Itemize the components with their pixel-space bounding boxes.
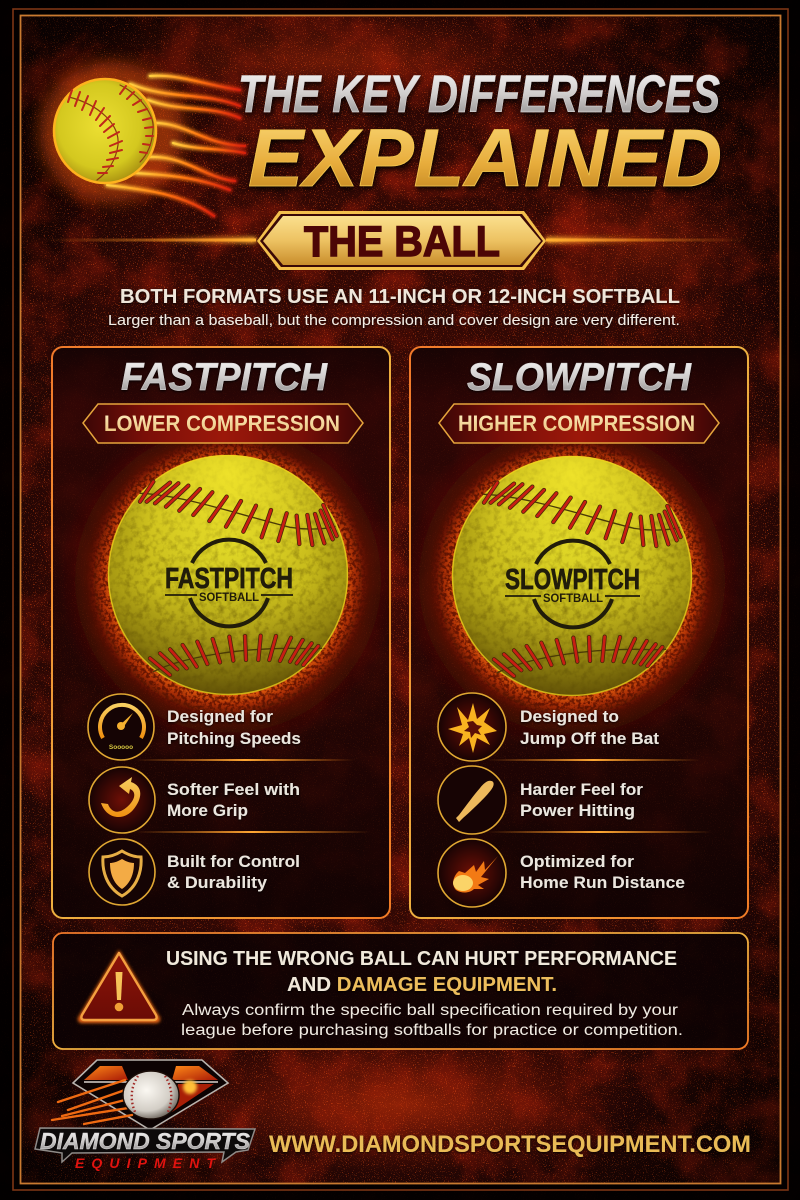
logo flame streaks [52, 1080, 132, 1124]
flaming softball icon [40, 62, 245, 216]
fire glow: slowpitch ball [411, 444, 734, 743]
icon: comet [453, 856, 498, 893]
logo wordmark: DIAMOND SPORTS [40, 1128, 251, 1154]
warning panel [53, 933, 748, 1049]
feature: power hitting [438, 766, 643, 834]
logo wordmark: EQUIPMENT [75, 1155, 216, 1171]
warning heading: USING THE WRONG BALL CAN HURT PERFORMANCE [166, 948, 677, 970]
icon: speedometer [100, 705, 144, 751]
feature: home run distance: Optimized for [520, 852, 634, 871]
compression banner: higher [439, 404, 719, 443]
feature: pitching speeds: Pitching Speeds [167, 729, 301, 748]
intro text [108, 285, 680, 329]
feature: home run distance: Home Run Distance [520, 873, 685, 892]
logo wordmark [35, 1128, 255, 1171]
ball logo [165, 540, 293, 626]
compression banner: lower: LOWER COMPRESSION [104, 411, 340, 436]
intro text: Larger than a baseball, but the compression and cover design are very different. [108, 312, 680, 329]
panel: slowpitch [400, 347, 748, 918]
warning body text [181, 1002, 683, 1039]
section badge: the ball: THE BALL [304, 218, 500, 266]
website url: WWW.DIAMONDSPORTSEQUIPMENT.COM [269, 1131, 751, 1158]
ball logo: FASTPITCH [165, 563, 293, 595]
flame streaks [107, 76, 245, 216]
ball logo [505, 541, 640, 627]
logo baseball [123, 1071, 179, 1119]
compression banner: lower [83, 404, 363, 443]
warning heading [166, 948, 677, 996]
panel heading: fastpitch: FASTPITCH [121, 356, 328, 399]
panel: fastpitch [52, 347, 400, 918]
ball logo: SOFTBALL [199, 592, 259, 604]
feature: control and durability: & Durability [167, 873, 268, 892]
fire glow: fastpitch ball [66, 444, 388, 742]
softball: fastpitch [108, 455, 348, 695]
softball: slowpitch [452, 456, 692, 696]
title [238, 65, 722, 204]
intro text: BOTH FORMATS USE AN 11-INCH OR 12-INCH SOFTBALL [120, 285, 680, 308]
feature: power hitting: Harder Feel for [520, 780, 643, 799]
section badge: the ball [45, 211, 746, 270]
feature: pitching speeds [88, 694, 301, 760]
feature: jump off the bat [438, 693, 659, 761]
feature: control and durability [89, 839, 300, 905]
icon: bat [456, 781, 494, 822]
feature: softer feel [89, 767, 300, 833]
icon: speedometer: Sooooo [109, 744, 133, 751]
feature: softer feel: Softer Feel with [167, 780, 300, 799]
warning body text: league before purchasing softballs for practice or competition. [181, 1022, 683, 1039]
warning body text: Always confirm the specific ball specification required by your [182, 1002, 678, 1019]
icon: warning triangle [78, 950, 160, 1023]
warning heading: AND DAMAGE EQUIPMENT. [287, 974, 557, 996]
icon: rotation arrow [101, 777, 140, 817]
ball logo: SOFTBALL [543, 593, 603, 605]
feature: jump off the bat: Jump Off the Bat [520, 729, 659, 748]
feature: softer feel: More Grip [167, 801, 248, 820]
compression banner: higher: HIGHER COMPRESSION [458, 411, 695, 436]
feature: power hitting: Power Hitting [520, 801, 635, 820]
icon: shield [103, 851, 141, 896]
panel heading: slowpitch: SLOWPITCH [467, 356, 692, 399]
seams [68, 85, 153, 180]
logo diamond [73, 1060, 228, 1130]
ball logo: SLOWPITCH [505, 564, 640, 596]
feature: control and durability: Built for Control [167, 852, 300, 871]
feature: jump off the bat: Designed to [520, 707, 619, 726]
logo: diamond sports equipment [35, 1060, 255, 1171]
icon: burst [448, 703, 497, 753]
feature: home run distance [438, 839, 685, 907]
feature: pitching speeds: Designed for [167, 707, 273, 726]
title: EXPLAINED [248, 113, 722, 204]
